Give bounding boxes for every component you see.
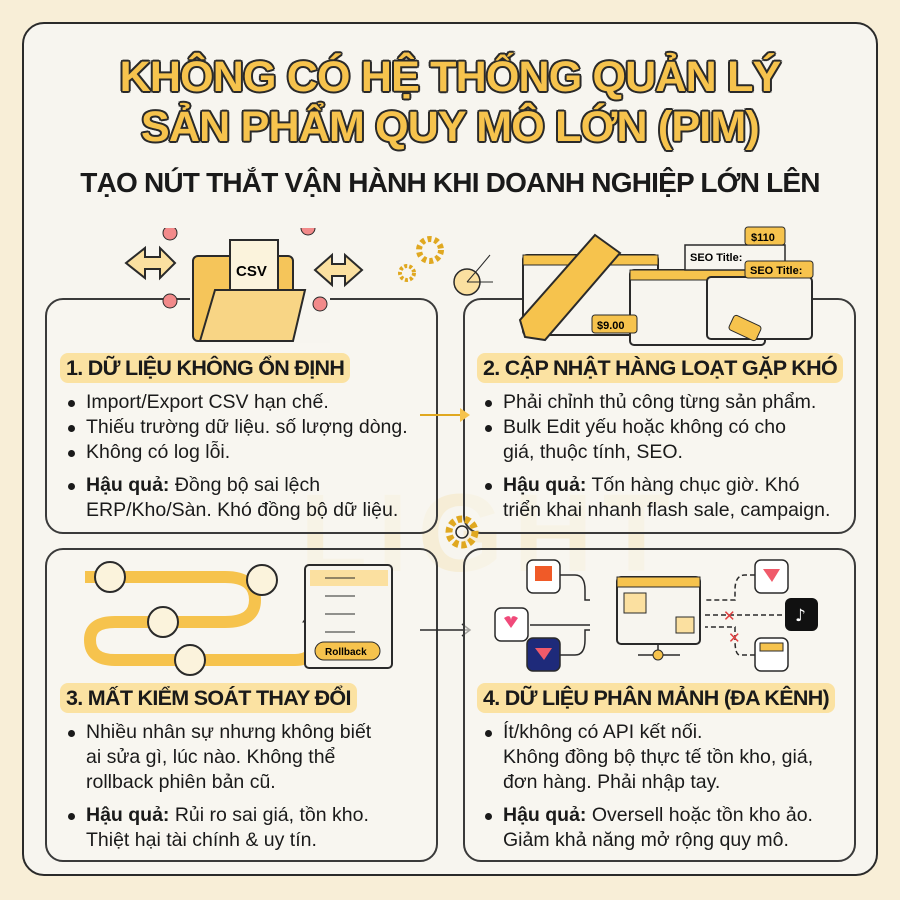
bullets 1: Không có log lỗi.: [86, 441, 230, 463]
illustration: pencil and pages: SEO Title:: [690, 252, 742, 264]
illustration: pencil and pages: $110: [751, 232, 775, 244]
gears center: [446, 516, 478, 548]
illustration: pencil and pages: $9.00: [597, 320, 625, 332]
arrow 3 to 4: [420, 623, 471, 637]
bullets 2: [485, 391, 830, 521]
illustration: csv folder: [124, 228, 364, 342]
title: [120, 50, 782, 152]
bullets 3: ai sửa gì, lúc nào. Không thể: [86, 746, 335, 768]
bullets 4: [485, 721, 813, 851]
bullets 1: Hậu quả: Đồng bộ sai lệch: [86, 474, 320, 496]
illustration: channels sync: ♪: [795, 606, 806, 626]
bullets 1: Import/Export CSV hạn chế.: [86, 391, 329, 413]
arrow 1 to 2: [420, 408, 470, 422]
illustration: pencil and pages: [398, 226, 814, 346]
bullets 4: Hậu quả: Oversell hoặc tồn kho ảo.: [503, 804, 813, 826]
bullets 4: Không đồng bộ thực tế tồn kho, giá,: [503, 746, 813, 768]
illustration: channels sync: ✕: [723, 607, 736, 625]
illustration: workflow people with rollback: Rollback: [325, 647, 367, 658]
panel 1: [45, 298, 438, 534]
illustration: csv folder: CSV: [236, 263, 267, 280]
heading 2: 2. CẬP NHẬT HÀNG LOẠT GẶP KHÓ: [483, 356, 837, 380]
watermark: LIGHT: [300, 472, 680, 595]
bullets 3: rollback phiên bản cũ.: [86, 771, 276, 793]
heading 4: 4. DỮ LIỆU PHÂN MẢNH (ĐA KÊNH): [483, 686, 829, 710]
bullets 3: Hậu quả: Rủi ro sai giá, tồn kho.: [86, 804, 369, 826]
illustration: channels sync: ✕: [728, 629, 741, 647]
bullets 4: Giảm khả năng mở rộng quy mô.: [503, 829, 789, 851]
bullets 4: Ít/không có API kết nối.: [503, 721, 702, 743]
subtitle: TẠO NÚT THẮT VẬN HÀNH KHI DOANH NGHIỆP LỚN LÊN: [80, 167, 820, 198]
illustration: pencil and pages: SEO Title:: [750, 265, 802, 277]
title: KHÔNG CÓ HỆ THỐNG QUẢN LÝ: [120, 53, 780, 101]
bullets 3: [68, 721, 372, 851]
panel 2: [463, 298, 856, 534]
bullets 1: [68, 391, 408, 521]
bullets 1: Thiếu trường dữ liệu. số lượng dòng.: [86, 416, 408, 438]
bullets 3: Thiệt hại tài chính & uy tín.: [86, 829, 317, 851]
bullets 3: Nhiều nhân sự nhưng không biết: [86, 721, 371, 743]
bullets 2: Hậu quả: Tốn hàng chục giờ. Khó: [503, 474, 799, 496]
bullets 2: triển khai nhanh flash sale, campaign.: [503, 499, 830, 521]
illustration: workflow people with rollback: [84, 561, 393, 676]
bullets 2: giá, thuộc tính, SEO.: [503, 441, 683, 463]
illustration: channels sync: [494, 559, 818, 672]
panel 4: [463, 548, 856, 862]
heading 3: 3. MẤT KIỂM SOÁT THAY ĐỔI: [66, 686, 351, 710]
bullets 2: Phải chỉnh thủ công từng sản phẩm.: [503, 391, 816, 413]
bullets 4: đơn hàng. Phải nhập tay.: [503, 771, 720, 793]
panel 3: [45, 548, 438, 862]
bullets 1: ERP/Kho/Sàn. Khó đồng bộ dữ liệu.: [86, 499, 398, 521]
heading 1: 1. DỮ LIỆU KHÔNG ỔN ĐỊNH: [66, 356, 344, 380]
bullets 2: Bulk Edit yếu hoặc không có cho: [503, 416, 786, 438]
title: SẢN PHẨM QUY MÔ LỚN (PIM): [141, 103, 759, 151]
